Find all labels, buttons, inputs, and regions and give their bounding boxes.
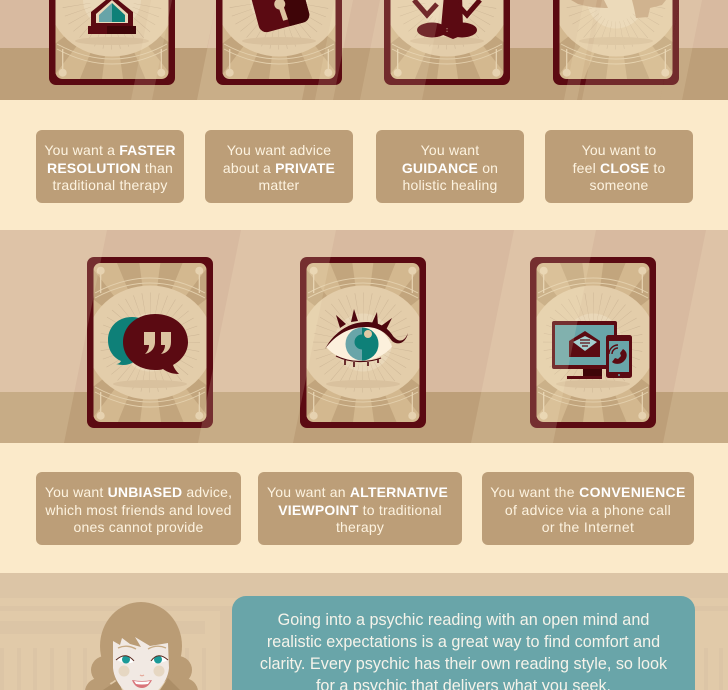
label: alternative viewpoint: VIEWPOINT to traditional — [278, 502, 442, 518]
label: feel close — [545, 130, 693, 203]
label: private matter — [205, 130, 353, 203]
label: alternative viewpoint — [258, 472, 462, 545]
label: holistic guidance: holistic healing — [402, 177, 498, 193]
label: holistic guidance: You want — [421, 142, 479, 158]
label: unbiased advice: ones cannot provide — [74, 519, 203, 535]
closing advice text box: Going into a psychic reading with an open mind and — [278, 611, 649, 629]
middle wall and floor band — [0, 230, 728, 443]
label: convenience: You want the CONVENIENCE — [490, 484, 686, 500]
label: alternative viewpoint: therapy — [336, 519, 384, 535]
label: private matter: matter — [259, 177, 299, 193]
label: faster resolution: traditional therapy — [52, 177, 168, 193]
icon: monitor and phone — [552, 321, 632, 379]
icon: eye — [325, 309, 408, 367]
label: alternative viewpoint: You want an ALTERNATIVE — [267, 484, 448, 500]
card: lock — [216, 0, 342, 85]
icon: reaching hands — [571, 0, 666, 18]
label: private matter: about a PRIVATE — [223, 160, 335, 176]
label: holistic guidance — [376, 130, 524, 203]
light beams: middle row — [0, 230, 728, 443]
icon: speech bubbles — [108, 314, 188, 374]
closing advice text box: clarity. Every psychic has their own reading style, so look — [260, 655, 667, 673]
label: feel close: someone — [590, 177, 648, 193]
label: feel close: You want to — [582, 142, 656, 158]
cream strip one — [0, 100, 728, 230]
label: faster resolution: RESOLUTION than — [47, 160, 173, 176]
woman portrait — [85, 602, 198, 690]
label: unbiased advice — [36, 472, 241, 545]
bottom background with wall panels — [0, 573, 728, 690]
card: eye — [300, 257, 426, 428]
label: private matter: You want advice — [227, 142, 331, 158]
label: convenience — [482, 472, 694, 545]
label: unbiased advice: which most friends and loved — [45, 502, 232, 518]
top wall and floor band — [0, 0, 728, 100]
icon: padlock — [248, 0, 311, 34]
icon: house shrine — [88, 0, 136, 34]
card: devices — [530, 257, 656, 428]
label: faster resolution — [36, 130, 184, 203]
label: convenience: of advice via a phone call — [505, 502, 671, 518]
label: feel close: feel CLOSE to — [573, 160, 665, 176]
label: faster resolution: You want a FASTER — [44, 142, 176, 158]
card: touching hands — [553, 0, 679, 85]
cream strip two — [0, 443, 728, 573]
closing advice text box: realistic expectations is a great way to find comfort and — [267, 633, 660, 651]
icon: meditating figure — [414, 0, 480, 39]
closing advice text box — [232, 596, 695, 690]
label: holistic guidance: GUIDANCE on — [402, 160, 498, 176]
card: meditation — [384, 0, 510, 85]
card: speech bubbles — [87, 257, 213, 428]
card: home — [49, 0, 175, 85]
light beams: top row — [131, 0, 702, 100]
label: convenience: or the Internet — [542, 519, 634, 535]
label: unbiased advice: You want UNBIASED advice, — [45, 484, 232, 500]
